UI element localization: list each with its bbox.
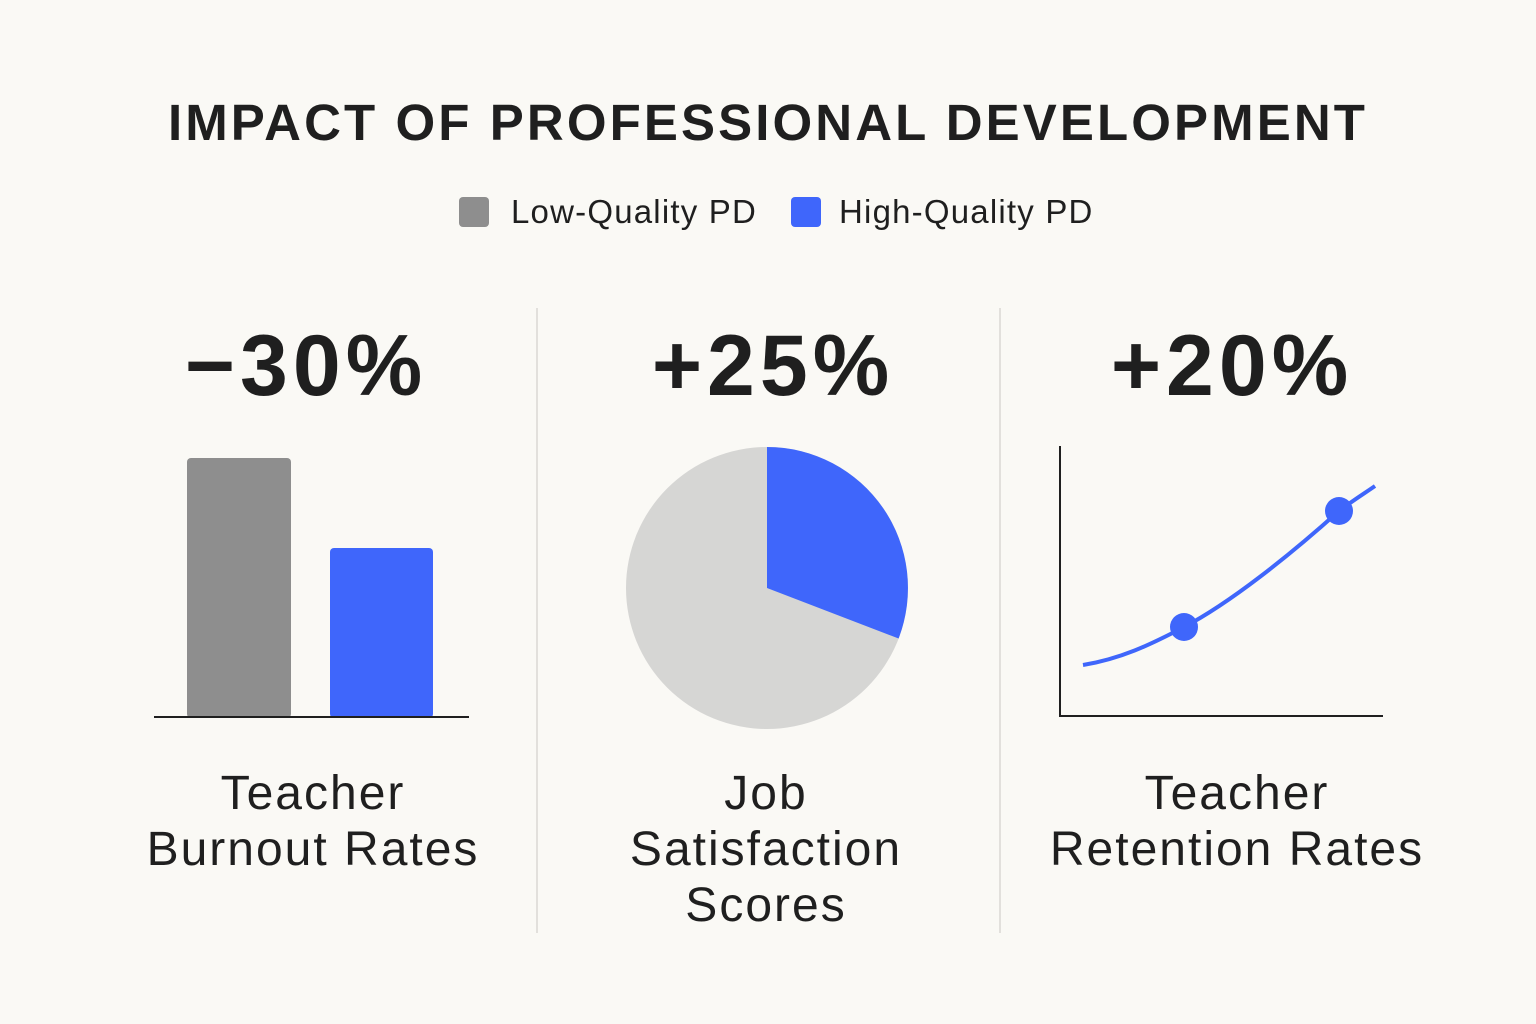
label: satisfaction: Job	[724, 767, 808, 820]
label: retention: Retention Rates	[1050, 823, 1424, 876]
label: satisfaction: Satisfaction	[630, 823, 902, 876]
label: satisfaction: Scores	[685, 879, 847, 932]
label: retention: Teacher	[1145, 767, 1329, 820]
data point	[1325, 497, 1353, 525]
label: retention	[1050, 767, 1424, 876]
legend: high quality	[791, 197, 821, 227]
label: satisfaction	[630, 767, 902, 932]
bar chart	[154, 458, 469, 718]
bar: high quality	[330, 548, 433, 718]
bar: low quality	[187, 458, 291, 718]
big number: retention: +20%	[1111, 318, 1353, 414]
legend label: low quality: Low-Quality PD	[511, 193, 757, 230]
legend label: high quality: High-Quality PD	[839, 193, 1094, 230]
big number: burnout: −30%	[185, 318, 427, 414]
pie chart	[626, 447, 908, 729]
data point	[1170, 613, 1198, 641]
label: burnout: Burnout Rates	[147, 823, 479, 876]
title: IMPACT OF PROFESSIONAL DEVELOPMENT	[168, 94, 1368, 151]
legend	[459, 193, 1094, 230]
label: burnout: Teacher	[221, 767, 405, 820]
label: burnout	[147, 767, 479, 876]
pie slice: high quality	[767, 447, 908, 638]
line chart	[1059, 446, 1383, 717]
legend: low quality	[459, 197, 489, 227]
big number: satisfaction: +25%	[652, 318, 894, 414]
trend line	[1083, 486, 1375, 665]
